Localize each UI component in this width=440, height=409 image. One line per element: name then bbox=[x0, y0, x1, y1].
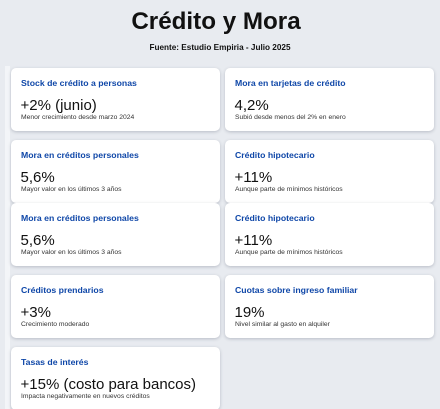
value: 5,6% bbox=[20, 169, 55, 186]
panel: crédito hipotecario bbox=[225, 140, 434, 203]
heading: Mora en tarjetas de crédito bbox=[235, 78, 346, 88]
panel: mora en tarjetas bbox=[225, 68, 434, 131]
value: +15% (costo para bancos) bbox=[20, 376, 196, 393]
panel: tasas de interés bbox=[11, 347, 220, 409]
description: Aunque parte de mínimos históricos bbox=[235, 186, 343, 193]
description: Aunque parte de mínimos históricos bbox=[235, 249, 343, 256]
panel: cuotas sobre ingreso familiar bbox=[225, 275, 434, 338]
description: Nivel similar al gasto en alquiler bbox=[235, 321, 330, 328]
heading: Mora en créditos personales bbox=[21, 150, 139, 160]
subtitle: source: Fuente: Estudio Empiria - Julio 2025 bbox=[149, 43, 291, 52]
panel: stock de crédito bbox=[11, 68, 220, 131]
panel: crédito hipotecario, repeated bbox=[225, 203, 434, 266]
description: Mayor valor en los últimos 3 años bbox=[21, 249, 122, 256]
panel: créditos prendarios bbox=[11, 275, 220, 338]
heading: Crédito hipotecario bbox=[235, 150, 315, 160]
heading: Crédito hipotecario bbox=[235, 212, 315, 222]
value: 4,2% bbox=[234, 97, 269, 114]
description: Subió desde menos del 2% en enero bbox=[235, 114, 346, 121]
description: Crecimiento moderado bbox=[21, 321, 89, 328]
panel: mora en créditos personales bbox=[11, 140, 220, 203]
description: Mayor valor en los últimos 3 años bbox=[21, 186, 122, 193]
heading: Créditos prendarios bbox=[21, 284, 104, 294]
heading: Stock de crédito a personas bbox=[21, 78, 137, 88]
description: Menor crecimiento desde marzo 2024 bbox=[21, 114, 134, 121]
description: Impacta negativamente en nuevos créditos bbox=[21, 393, 150, 400]
value: +2% (junio) bbox=[20, 97, 97, 114]
heading: Tasas de interés bbox=[21, 356, 88, 366]
panel: mora en créditos personales, repeated bbox=[11, 203, 220, 266]
value: +11% bbox=[234, 232, 272, 249]
title: Crédito y Mora bbox=[131, 8, 301, 35]
value: 5,6% bbox=[20, 232, 55, 249]
heading: Cuotas sobre ingreso familiar bbox=[235, 284, 358, 294]
value: +3% bbox=[20, 304, 51, 321]
value: 19% bbox=[234, 304, 265, 321]
value: +11% bbox=[234, 169, 272, 186]
heading: Mora en créditos personales bbox=[21, 212, 139, 222]
left scroll strip bbox=[5, 66, 10, 409]
